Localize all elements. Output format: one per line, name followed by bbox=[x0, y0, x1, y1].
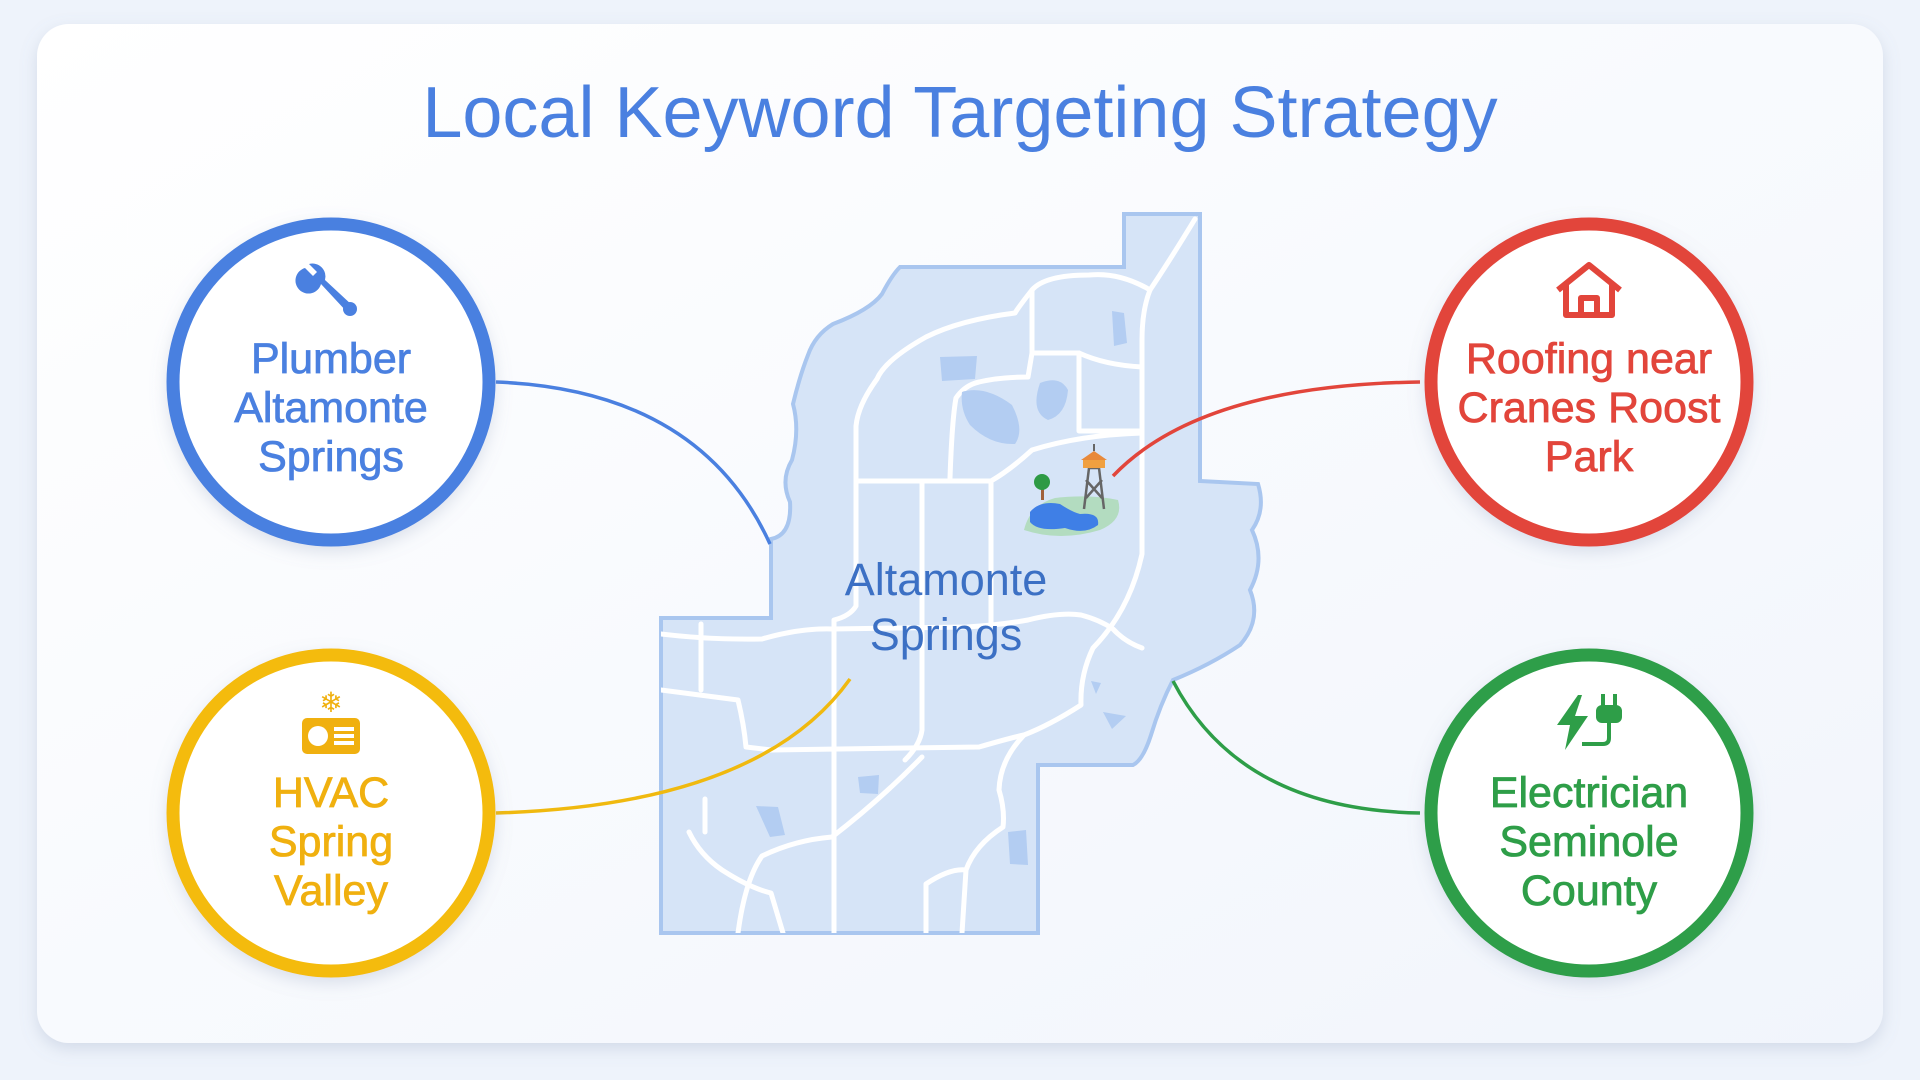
park landmark with tower bbox=[1024, 444, 1119, 536]
map label: Altamonte bbox=[845, 554, 1047, 605]
circle: hvac: Spring bbox=[269, 818, 393, 866]
circle: roofing: Cranes Roost bbox=[1458, 384, 1720, 432]
circle: roofing bbox=[1431, 224, 1747, 540]
circle: hvac: HVAC bbox=[273, 769, 389, 817]
circle: plumber: Plumber bbox=[251, 335, 411, 383]
circle: electrician: County bbox=[1521, 867, 1658, 915]
connector: yellow bbox=[496, 679, 850, 813]
circle: plumber: Altamonte bbox=[234, 384, 428, 432]
icon: ac unit: ❄ bbox=[319, 686, 343, 719]
icon: bolt and plug bbox=[1557, 694, 1622, 750]
connector: red bbox=[1113, 382, 1420, 476]
circle: roofing: Park bbox=[1545, 433, 1634, 481]
icon: house bbox=[1558, 265, 1620, 315]
circle: hvac: Valley bbox=[274, 867, 388, 915]
connector: green bbox=[1173, 681, 1420, 813]
icon: wrench bbox=[295, 264, 357, 316]
circle: plumber: Springs bbox=[258, 433, 404, 481]
circle: electrician bbox=[1431, 655, 1747, 971]
title: Local Keyword Targeting Strategy bbox=[422, 73, 1498, 153]
circle: electrician: Electrician bbox=[1490, 769, 1688, 817]
map label bbox=[845, 554, 1047, 660]
circle: roofing: Roofing near bbox=[1466, 335, 1712, 383]
connector: blue bbox=[496, 382, 770, 544]
map bbox=[661, 214, 1261, 933]
circle: plumber bbox=[173, 224, 489, 540]
map label: Springs bbox=[870, 609, 1022, 660]
circle: electrician: Seminole bbox=[1499, 818, 1679, 866]
icon: ac unit bbox=[302, 686, 360, 754]
circle: hvac bbox=[173, 655, 489, 971]
